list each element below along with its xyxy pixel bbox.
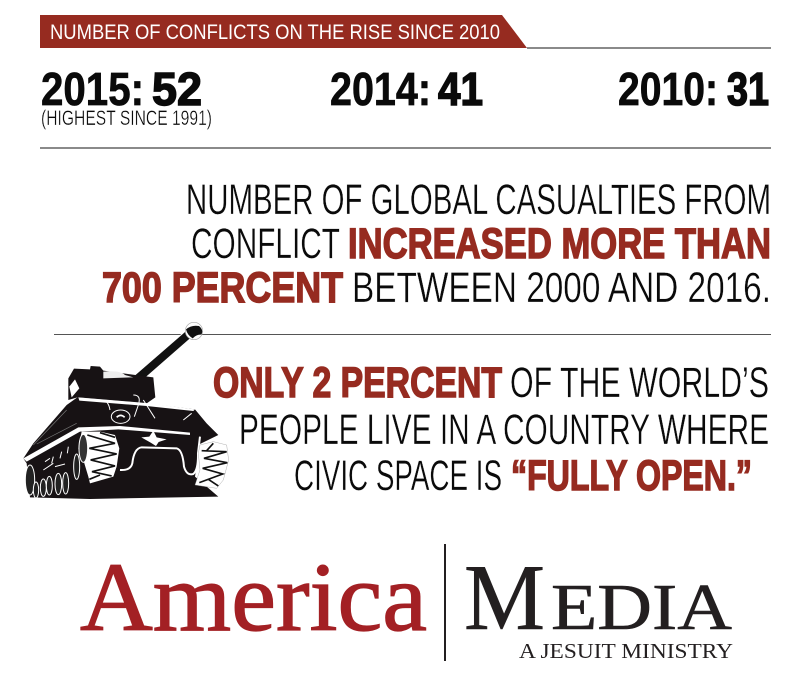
stat: 2010: 2010: — [618, 63, 718, 115]
logo word: America: America — [80, 544, 427, 651]
banner: conflicts heading — [40, 15, 771, 49]
banner: conflicts heading: NUMBER OF CONFLICTS ON THE RISE SINCE 2010 — [50, 21, 500, 44]
logo word: Media: M — [464, 546, 545, 650]
logo word: Media — [464, 546, 732, 650]
note: highest since 1991: (HIGHEST SINCE 1991) — [41, 107, 212, 130]
stat: 2014: 41 — [438, 63, 483, 115]
stat: 2010: 31 — [727, 63, 769, 115]
text block: civic space: ONLY 2 PERCENT — [213, 359, 502, 407]
stat: 2015 — [41, 63, 212, 130]
text block: civic space: CIVIC SPACE IS — [294, 452, 502, 500]
text block: casualties: 700 PERCENT — [102, 264, 343, 312]
stat: 2015: 2015: — [41, 63, 144, 115]
logo: America Media — [80, 544, 733, 663]
icon: tank — [23, 322, 229, 499]
stat: 2014: 2014: — [330, 63, 431, 115]
text block: casualties: CONFLICT — [191, 220, 340, 268]
logo word: Media: EDIA — [551, 571, 732, 644]
logo tagline: A JESUIT MINISTRY — [519, 639, 733, 663]
text block: civic space — [213, 359, 769, 500]
text block: casualties — [102, 176, 771, 312]
stat: 2015: 52 — [152, 63, 202, 115]
